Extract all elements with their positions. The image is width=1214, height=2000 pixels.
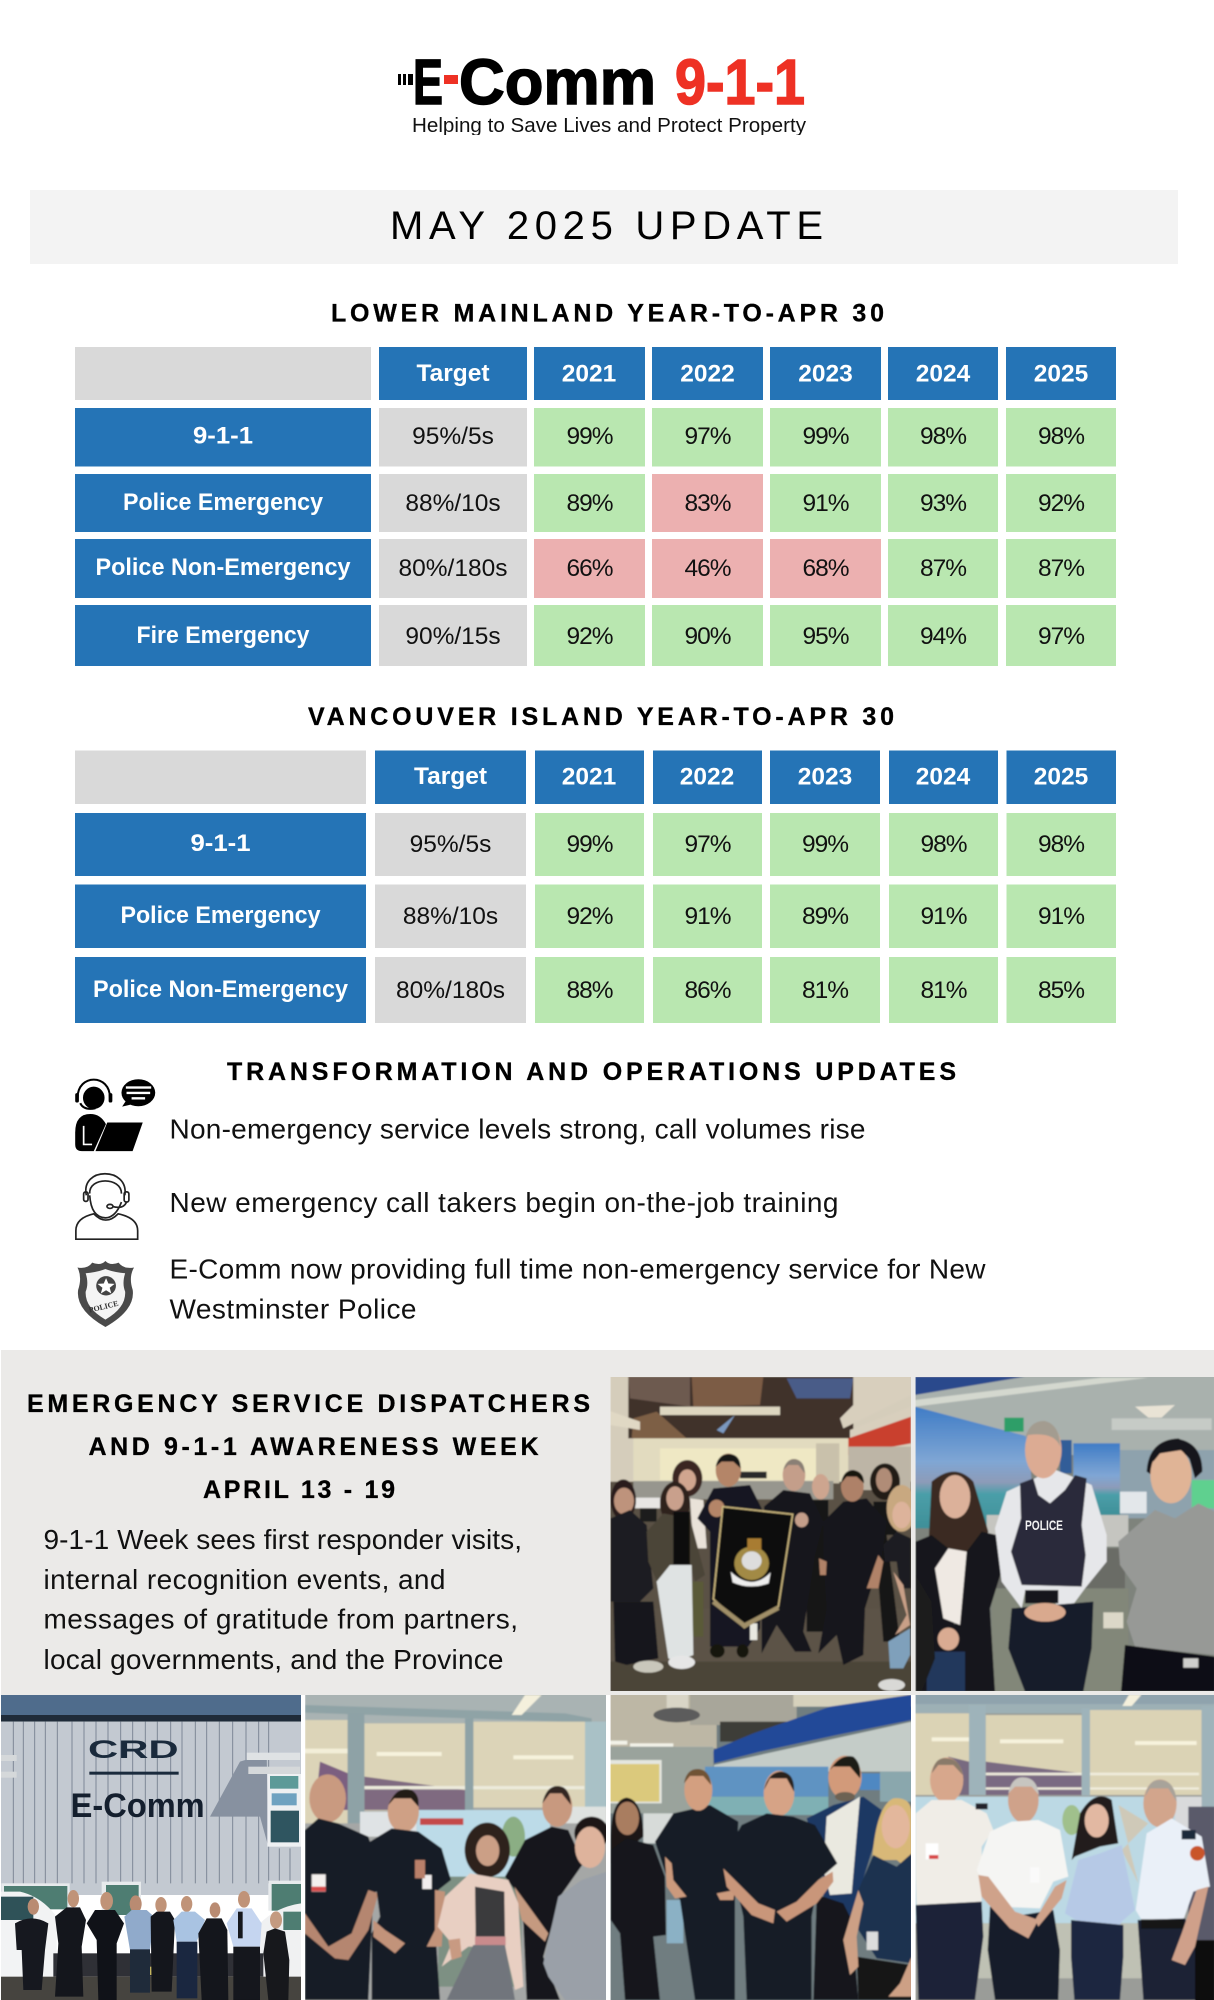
- heading: Vancouver Island: VANCOUVER ISLAND YEAR-TO-APR 30: [308, 703, 894, 731]
- row: Police Non-Emergency: 87%: [920, 555, 966, 582]
- row: Fire Emergency: 97%: [1038, 623, 1084, 650]
- icon: headset person outline: [76, 1174, 138, 1239]
- icon: police badge: POLICE: [88, 1299, 119, 1315]
- logo: E-Comm 9-1-1: [398, 46, 820, 143]
- photo: CRD E-Comm building group: CRD: [88, 1736, 179, 1764]
- heading: Transformation and Operations: TRANSFORMATION AND OPERATIONS UPDATES: [227, 1058, 956, 1086]
- row: Police Emergency: 91%: [684, 903, 731, 930]
- title band: [30, 190, 1178, 264]
- row: Police Emergency: 93%: [920, 490, 966, 517]
- row: Police Non-Emergency: Police Non-Emergency: [93, 976, 348, 1003]
- title band: MAY 2025 UPDATE: [390, 204, 823, 248]
- text: full time non-emergency service: Westminster Police: [170, 1294, 416, 1324]
- row: 9-1-1: [75, 813, 1116, 876]
- row: Fire Emergency: 95%: [802, 623, 849, 650]
- row: Fire Emergency: 92%: [566, 623, 613, 650]
- header row: Target: [414, 763, 487, 790]
- logo: E-Comm 9-1-1: Comm: [459, 46, 656, 118]
- row: Police Emergency: 89%: [802, 903, 848, 930]
- icon: call taker at laptop with speech bubble: [75, 1079, 155, 1151]
- row: Police Emergency: 83%: [684, 490, 731, 517]
- row: Police Non-Emergency: [75, 539, 1116, 598]
- heading: awareness week: [27, 1390, 590, 1504]
- header row: [75, 750, 1116, 804]
- heading: Lower Mainland: LOWER MAINLAND YEAR-TO-APR 30: [331, 300, 884, 328]
- icon: police badge: [77, 1261, 134, 1327]
- row: Police Non-Emergency: [75, 957, 1116, 1023]
- row: 9-1-1: 98%: [920, 831, 967, 858]
- logo: E-Comm 9-1-1: Helping to Save Lives and Protect Property: [412, 115, 806, 137]
- row: Police Emergency: 89%: [566, 490, 613, 517]
- photo: fire chiefs group: [915, 1693, 1214, 2000]
- header row: 2023: [798, 764, 852, 790]
- table: Vancouver Island: [75, 750, 1116, 1023]
- row: Police Emergency: 91%: [920, 903, 967, 930]
- row: Police Non-Emergency: Police Non-Emergency: [96, 554, 351, 581]
- row: 9-1-1: 99%: [566, 423, 613, 450]
- row: 9-1-1: 95%/5s: [410, 831, 491, 858]
- logo: E-Comm 9-1-1: E: [413, 46, 443, 118]
- row: 9-1-1: 9-1-1: [193, 422, 253, 450]
- text: full time non-emergency service: E-Comm now providing full time non-emergency service for New: [170, 1254, 986, 1284]
- header row: 2021: [562, 360, 616, 388]
- text: non-emergency service levels: Non-emergency service levels strong, call volumes rise: [170, 1114, 866, 1144]
- row: Fire Emergency: Fire Emergency: [136, 622, 310, 649]
- photo: police dispatch group with banner: [610, 1375, 917, 1693]
- row: 9-1-1: 98%: [920, 423, 966, 450]
- row: Police Non-Emergency: 80%/180s: [399, 555, 507, 582]
- heading: awareness week: APRIL 13 - 19: [203, 1476, 395, 1504]
- text: awareness week description: messages of gratitude from partners,: [44, 1604, 518, 1634]
- header row: 2025: [1034, 360, 1088, 388]
- text: awareness week description: [44, 1524, 522, 1675]
- header row: 2024: [916, 360, 971, 388]
- row: Police Emergency: 92%: [1038, 490, 1084, 517]
- header row: 2021: [562, 764, 616, 790]
- header row: 2024: [916, 764, 971, 790]
- row: 9-1-1: 9-1-1: [190, 830, 250, 857]
- text: awareness week description: 9-1-1 Week sees first responder visits,: [44, 1524, 522, 1555]
- text: new emergency call takers: New emergency call takers begin on-the-job training: [170, 1187, 838, 1218]
- row: Police Non-Emergency: 68%: [802, 555, 849, 582]
- row: Police Emergency: 91%: [1038, 903, 1084, 930]
- header row: [75, 347, 1116, 400]
- row: 9-1-1: 97%: [684, 423, 731, 450]
- row: Police Emergency: 91%: [802, 490, 849, 517]
- photo: RCMP officer with call takers: [915, 1375, 1214, 1693]
- row: Police Emergency: 88%/10s: [403, 903, 498, 930]
- header row: 2022: [680, 360, 735, 388]
- row: Police Non-Emergency: 85%: [1038, 977, 1084, 1004]
- row: 9-1-1: 98%: [1038, 423, 1084, 450]
- header row: 2022: [680, 764, 734, 790]
- row: 9-1-1: 99%: [802, 831, 848, 858]
- header row: 2025: [1034, 764, 1088, 790]
- row: Police Emergency: 88%/10s: [405, 490, 501, 517]
- photo: police officers in dispatch room: [610, 1693, 915, 2000]
- row: Police Non-Emergency: 81%: [920, 977, 967, 1004]
- panel: 9-1-1 awareness week: [1, 1350, 1214, 1695]
- row: Police Non-Emergency: 87%: [1038, 555, 1084, 582]
- row: 9-1-1: 97%: [684, 831, 731, 858]
- row: Fire Emergency: 90%/15s: [405, 623, 501, 650]
- row: Police Emergency: [75, 884, 1116, 948]
- heading: awareness week: AND 9-1-1 AWARENESS WEEK: [88, 1433, 538, 1461]
- row: Police Non-Emergency: 88%: [566, 977, 613, 1004]
- header row: Target: [416, 360, 490, 387]
- row: Police Emergency: Police Emergency: [120, 902, 321, 929]
- row: Police Non-Emergency: 66%: [566, 555, 613, 582]
- text: awareness week description: internal recognition events, and: [44, 1564, 446, 1595]
- row: Police Emergency: [75, 474, 1116, 532]
- heading: awareness week: EMERGENCY SERVICE DISPATCHERS: [27, 1390, 590, 1418]
- row: 9-1-1: 99%: [802, 423, 849, 450]
- row: Fire Emergency: 90%: [684, 623, 731, 650]
- table: Lower Mainland: [75, 347, 1116, 666]
- row: Police Non-Emergency: 86%: [684, 977, 731, 1004]
- logo: E-Comm 9-1-1: 9-1-1: [675, 46, 805, 118]
- text: full time non-emergency service: [170, 1254, 986, 1324]
- row: Police Non-Emergency: 80%/180s: [396, 977, 505, 1004]
- row: 9-1-1: 99%: [566, 831, 613, 858]
- row: Fire Emergency: [75, 605, 1116, 666]
- row: Police Non-Emergency: 81%: [802, 977, 848, 1004]
- row: Police Emergency: 92%: [566, 903, 613, 930]
- row: Fire Emergency: 94%: [920, 623, 966, 650]
- row: 9-1-1: 95%/5s: [412, 423, 494, 450]
- header row: 2023: [798, 360, 853, 388]
- text: awareness week description: local governments, and the Province: [44, 1644, 504, 1675]
- photo: CRD E-Comm building group: E-Comm: [71, 1787, 205, 1825]
- photo: CRD E-Comm building group: [0, 1693, 303, 2000]
- row: 9-1-1: [75, 408, 1116, 466]
- row: 9-1-1: 98%: [1038, 831, 1084, 858]
- row: Police Emergency: Police Emergency: [123, 489, 323, 516]
- vest lettering: POLICE: [1025, 1517, 1063, 1533]
- row: Police Non-Emergency: 46%: [684, 555, 731, 582]
- photo: fire officers group with woman: [305, 1693, 610, 2000]
